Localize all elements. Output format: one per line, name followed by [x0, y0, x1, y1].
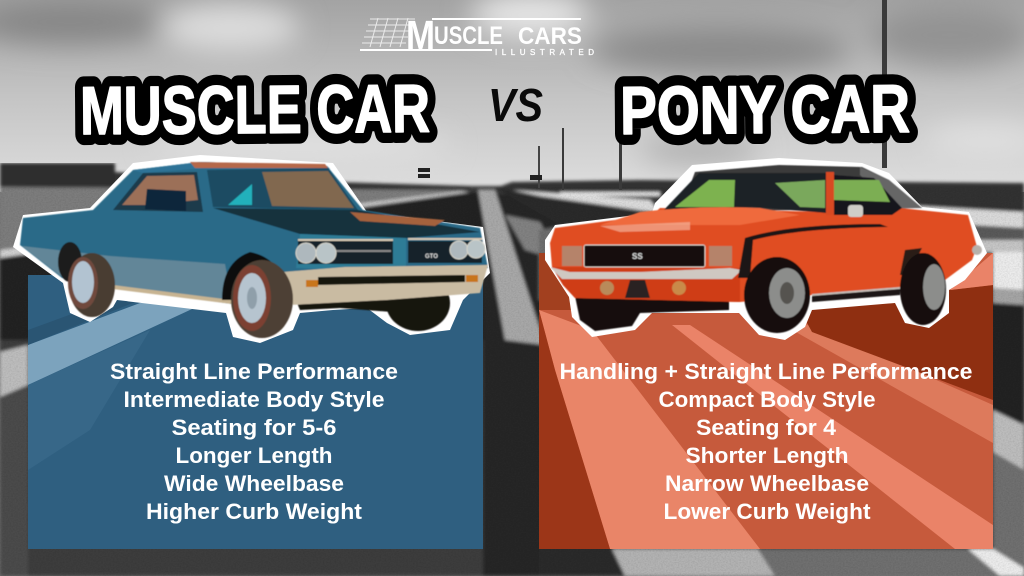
text block: pony car traits: Compact Body Style [658, 387, 876, 412]
car: orange Chevrolet Camaro [545, 158, 987, 340]
logo: Muscle Cars Illustrated: CARS [518, 23, 582, 50]
text block: pony car traits: Seating for 4 [696, 415, 837, 440]
title: Muscle Car: MUSCLE CAR [80, 71, 430, 149]
car: blue Pontiac GTO: GTO [425, 254, 438, 260]
logo: Muscle Cars Illustrated: M [406, 12, 435, 58]
text block: muscle car traits: Longer Length [176, 443, 332, 468]
text block: muscle car traits [110, 359, 398, 524]
car: blue Pontiac GTO [13, 155, 490, 343]
text block: pony car traits: Handling + Straight Line Performance [560, 359, 972, 384]
text block: muscle car traits: Wide Wheelbase [164, 471, 344, 496]
title: Pony Car: PONY CAR [620, 71, 910, 149]
logo: Muscle Cars Illustrated: USCLE [434, 22, 503, 50]
text block: muscle car traits: Higher Curb Weight [146, 499, 363, 524]
logo: Muscle Cars Illustrated: ILLUSTRATED [495, 48, 594, 57]
text block: pony car traits [560, 359, 972, 524]
title: vs: VS [488, 79, 543, 131]
background: sky with clouds [0, 0, 1024, 192]
title: Muscle Car: MUSCLE CAR [80, 71, 430, 149]
logo: Muscle Cars Illustrated [360, 12, 594, 58]
text block: muscle car traits: Straight Line Performance [110, 359, 398, 384]
text block: muscle car traits: Intermediate Body Style [124, 387, 384, 412]
text block: pony car traits: Narrow Wheelbase [665, 471, 869, 496]
car: orange Chevrolet Camaro: SS [632, 252, 643, 261]
text block: pony car traits: Shorter Length [686, 443, 848, 468]
title: Pony Car: PONY CAR [620, 71, 910, 149]
panel: muscle car [28, 275, 483, 549]
panel: pony car [539, 253, 993, 549]
text block: pony car traits: Lower Curb Weight [664, 499, 871, 524]
text block: muscle car traits: Seating for 5-6 [172, 415, 336, 440]
